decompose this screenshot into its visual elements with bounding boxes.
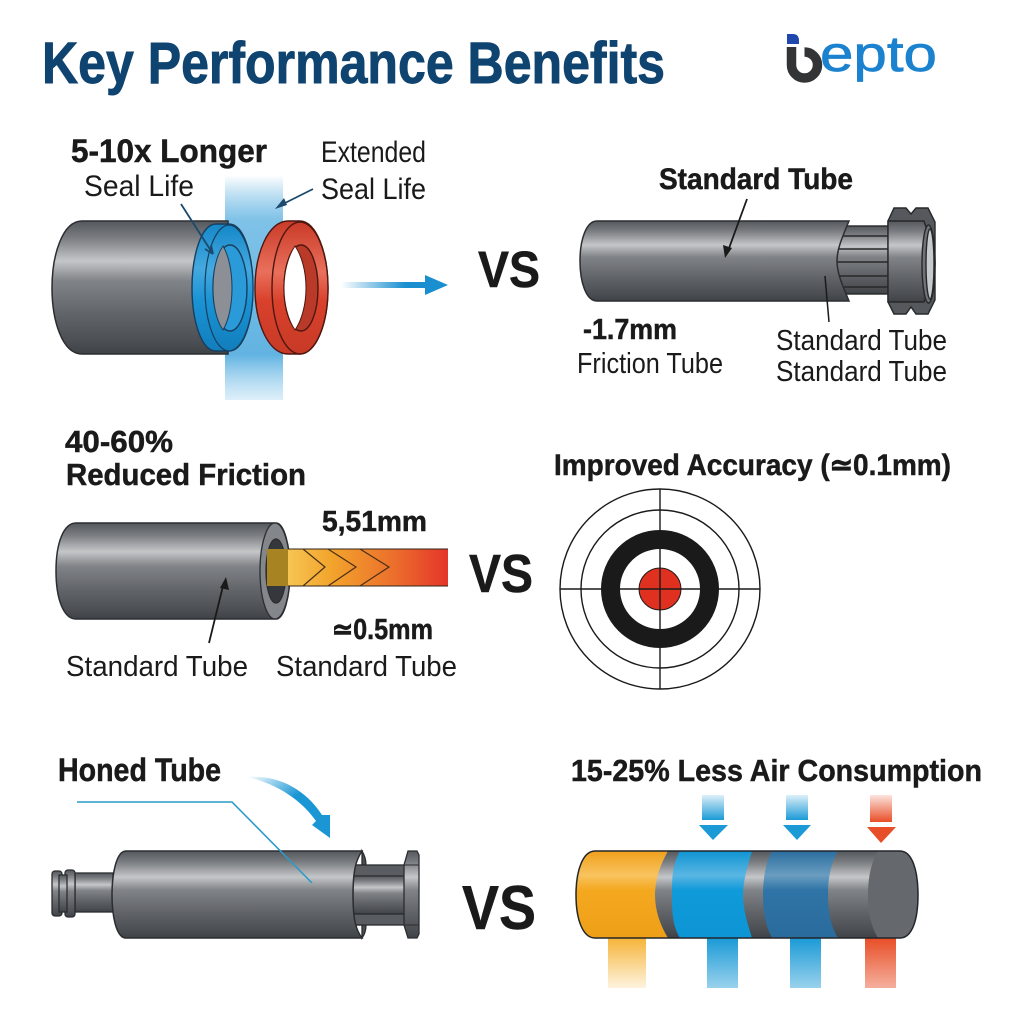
right stem and flange — [352, 851, 419, 938]
tube body — [56, 523, 290, 619]
logo: bepto: epto — [820, 26, 937, 82]
heading: standard tube: Standard Tube — [659, 163, 853, 196]
panel: honed tube — [52, 752, 419, 938]
hex nut — [888, 208, 935, 314]
arrowhead: to tube — [723, 245, 732, 258]
arrowhead: to band — [275, 198, 287, 209]
tube body — [580, 221, 849, 301]
leader line — [77, 802, 312, 883]
panel: standard tube — [577, 163, 947, 388]
arrow: horizontal blue — [341, 275, 448, 295]
label: standard tube right: Standard Tube — [276, 651, 457, 683]
label: seal life: Seal Life — [84, 170, 194, 203]
label: 0.5mm: ≃0.5mm — [332, 614, 433, 646]
heading: honed tube: Honed Tube — [58, 752, 221, 788]
tube body — [112, 851, 362, 938]
heading: reduced friction: Reduced Friction — [66, 457, 306, 492]
label: standard tube left: Standard Tube — [66, 651, 248, 683]
red seal ring — [255, 221, 328, 354]
heading: 40-60%: 40-60% — [65, 424, 173, 459]
label: seal life right: Seal Life — [321, 173, 426, 206]
tube end — [260, 523, 290, 619]
blue seal band — [225, 175, 283, 400]
spline section — [835, 226, 890, 294]
drip red — [865, 938, 896, 988]
arrow down blue 2 — [783, 795, 811, 840]
heading: less air consumption: 15-25% Less Air Consumption — [571, 753, 982, 788]
label: -1.7mm: -1.7mm — [583, 314, 677, 346]
heading: improved accuracy: Improved Accuracy (≃0.1mm) — [554, 449, 951, 482]
drip blue 2 — [790, 938, 821, 988]
panel: less air consumption — [571, 753, 982, 988]
arrow: to tube — [728, 199, 747, 251]
arrow: to tube — [209, 586, 223, 643]
drip orange — [608, 938, 646, 988]
panel: improved accuracy — [554, 449, 951, 689]
VS 2: VS — [469, 544, 533, 604]
title: Key Performance Benefits — [42, 31, 665, 96]
arrow: to blue ring — [181, 204, 213, 254]
arrow: to band — [281, 189, 313, 205]
segmented cylinder — [576, 851, 918, 938]
arrow down red — [867, 795, 896, 843]
label: standard tube 1: Standard Tube — [776, 325, 947, 357]
blue seal ring — [192, 224, 253, 351]
VS 1: VS — [478, 241, 540, 298]
panel: seal life comparison — [52, 133, 448, 400]
panel: reduced friction — [56, 424, 457, 683]
label: 5,51mm: 5,51mm — [322, 506, 427, 538]
VS 3: VS — [462, 874, 536, 943]
label: standard tube 2: Standard Tube — [776, 356, 947, 388]
left stem and knob — [52, 870, 113, 917]
drip blue 1 — [707, 938, 738, 988]
label: extended: Extended — [321, 136, 426, 169]
metal cylinder — [52, 221, 228, 354]
arrow down blue 1 — [699, 795, 728, 840]
arrowhead: to tube — [220, 577, 229, 590]
label: friction tube: Friction Tube — [577, 348, 723, 380]
heading: 5-10x longer: 5-10x Longer — [71, 133, 267, 169]
curved arrow — [247, 777, 330, 838]
target — [560, 489, 760, 689]
heat flow — [267, 549, 448, 586]
logo: bepto — [787, 26, 937, 82]
leader line — [825, 276, 829, 322]
